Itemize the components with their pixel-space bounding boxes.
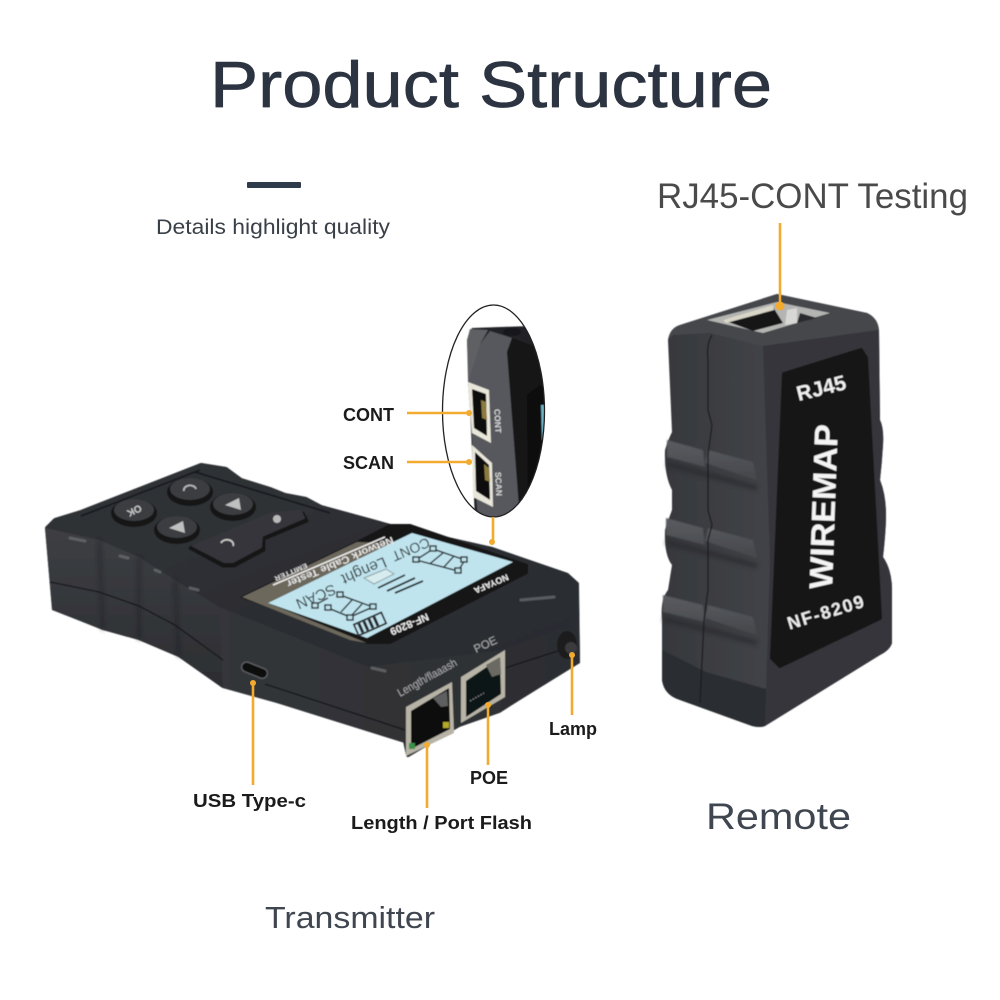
device body silhouette xyxy=(47,465,578,755)
remote left ridge 3 xyxy=(663,595,757,635)
inset label: SCAN: SCAN xyxy=(493,472,504,496)
remote left ridge 2 xyxy=(666,518,757,558)
inset label: CONT: CONT xyxy=(492,409,503,434)
remote ridge shadows xyxy=(663,464,757,643)
callout: Lamp xyxy=(549,652,597,739)
title: Product Structure xyxy=(210,48,772,121)
rib highlights xyxy=(70,538,554,671)
SCAN port xyxy=(472,445,493,507)
bezel label: EMITTER: EMITTER xyxy=(273,561,308,581)
callout: USB Type-c xyxy=(193,680,306,811)
remote right shaded edge xyxy=(763,330,892,726)
remote seam xyxy=(700,335,712,703)
callout: RJ45 socket pointer xyxy=(776,223,784,310)
LCD length bars xyxy=(378,575,423,593)
callout: SCAN xyxy=(343,453,472,473)
callout: Lamp: Lamp xyxy=(549,719,597,739)
button: return xyxy=(167,478,213,506)
LCD text: CONT: CONT xyxy=(389,534,432,565)
remote device xyxy=(662,294,892,727)
LCD battery icon xyxy=(354,612,386,636)
callout: POE xyxy=(470,702,508,788)
heading: RJ45-CONT Testing: RJ45-CONT Testing xyxy=(657,177,968,216)
remote body xyxy=(662,294,892,727)
front face xyxy=(219,600,580,757)
callout: SCAN: SCAN xyxy=(343,453,394,473)
port label: Length/flaaash: Length/flaaash xyxy=(396,657,459,700)
callout: POE: POE xyxy=(470,768,508,788)
remote top face xyxy=(668,294,879,346)
USB Type-C port xyxy=(240,660,269,680)
power and backlight key xyxy=(190,511,307,566)
callout: CONT xyxy=(343,405,472,425)
inset outline xyxy=(442,305,544,517)
button: OK: OK xyxy=(124,502,143,518)
caption: Remote: Remote xyxy=(706,796,851,837)
button: OK xyxy=(111,499,157,527)
CONT port xyxy=(468,382,491,443)
bezel label: model: NF-8209 xyxy=(388,610,430,637)
LCD text: Length: Lenght xyxy=(338,553,389,587)
inset body xyxy=(466,325,534,511)
bezel label: Network Cable Tester: Network Cable Tester xyxy=(285,534,395,589)
callout: CONT: CONT xyxy=(343,405,394,425)
remote left ridge 1 xyxy=(667,440,757,480)
RJ45 socket opening xyxy=(707,302,830,333)
callout: Length / Port Flash: Length / Port Flash xyxy=(351,813,532,833)
connector: inset to device xyxy=(489,517,495,545)
transmitter device xyxy=(45,463,580,757)
button: down arrow xyxy=(154,516,200,544)
bezel label: brand: NOYAFA xyxy=(472,572,510,596)
LCD wiremap icon bottom xyxy=(312,592,376,620)
inset top screw hole xyxy=(504,328,520,336)
LCD signal bar block xyxy=(364,569,394,584)
callout: USB Type-c: USB Type-c xyxy=(193,791,306,811)
caption: Transmitter: Transmitter xyxy=(265,900,435,935)
bezel white line xyxy=(273,537,385,585)
LCD screen xyxy=(268,533,513,638)
rib shading xyxy=(99,540,179,657)
LCD wiremap icon top xyxy=(413,546,467,573)
panel text: WIREMAP: WIREMAP xyxy=(802,424,845,590)
panel text: NF-8209: NF-8209 xyxy=(785,591,868,634)
panel text: RJ45: RJ45 xyxy=(794,371,849,406)
inset: side ports ellipse xyxy=(442,305,550,520)
port label: POE: POE xyxy=(472,635,500,656)
seam line and rib details xyxy=(50,582,561,730)
RJ45 port: POE xyxy=(461,650,505,723)
lamp xyxy=(557,631,577,659)
button: up arrow xyxy=(210,493,256,521)
inset screen glimpse xyxy=(527,385,544,488)
bezel grey strip xyxy=(242,542,392,643)
inset middle face xyxy=(468,330,520,516)
left ribbed side xyxy=(45,528,223,688)
button panel groove xyxy=(81,470,330,516)
callout: Length / Port Flash xyxy=(351,742,532,833)
LCD bezel xyxy=(242,525,527,643)
remote dark shaded bottom xyxy=(662,650,770,727)
inset dark corner xyxy=(507,338,542,502)
RJ45 port: length xyxy=(406,682,454,756)
inset clipped photo xyxy=(467,326,550,520)
title accent bar xyxy=(247,182,301,188)
inset grey side face xyxy=(467,329,488,382)
top face xyxy=(45,463,579,667)
remote black label panel xyxy=(772,350,880,666)
LCD text: SCAN: SCAN xyxy=(293,580,338,612)
subtitle: Details highlight quality xyxy=(156,216,391,239)
